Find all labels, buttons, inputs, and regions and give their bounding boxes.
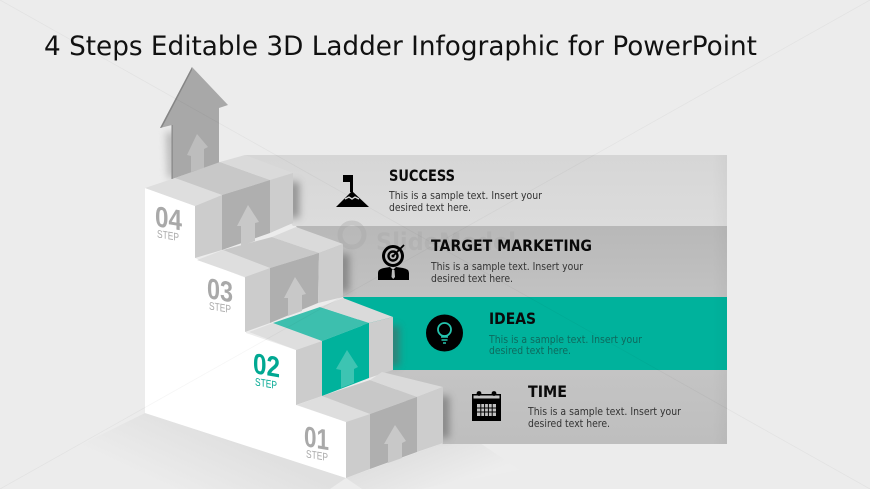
- text: target marketing: desired text here.: [431, 273, 513, 285]
- text: success: This is a sample text. Insert your: [388, 190, 543, 202]
- text: ideas: This is a sample text. Insert your: [488, 334, 643, 346]
- watermark: [340, 223, 516, 256]
- text: success: [388, 166, 543, 214]
- panel: ideas band: [343, 297, 727, 370]
- step label 04: STEP: [157, 228, 179, 244]
- step label 03: STEP: [209, 300, 231, 316]
- text: time: [527, 382, 682, 430]
- white staircase body: [145, 188, 346, 478]
- step label 04: 04: [155, 201, 183, 238]
- text: time: TIME: [528, 382, 567, 401]
- text: ideas: IDEAS: [489, 309, 536, 328]
- text: target marketing: This is a sample text. Insert your: [430, 261, 584, 273]
- step 3 block: [197, 227, 343, 332]
- icon: flag on mountain: [336, 175, 369, 207]
- panel: target marketing band: [296, 226, 727, 297]
- big up arrow: [160, 67, 228, 179]
- panel: time band: [380, 370, 727, 444]
- title: 4 Steps Editable 3D Ladder Infographic for PowerPoint: [44, 31, 757, 62]
- step label 03: 03: [207, 273, 233, 309]
- text: ideas: [488, 309, 643, 357]
- step label 02: 02: [253, 348, 280, 385]
- text: time: desired text here.: [528, 418, 610, 430]
- step 2 block highlighted: [249, 298, 393, 405]
- text: ideas: desired text here.: [489, 345, 571, 357]
- text: target marketing: TARGET MARKETING: [431, 236, 592, 255]
- text: target marketing: [430, 236, 592, 285]
- step 1 block: [297, 372, 443, 478]
- text: time: This is a sample text. Insert your: [527, 406, 682, 418]
- step label 01: STEP: [306, 448, 328, 464]
- floor shadow: [60, 413, 520, 489]
- text: success: SUCCESS: [389, 166, 455, 185]
- text: success: desired text here.: [389, 202, 471, 214]
- step label 02: STEP: [255, 376, 277, 392]
- icon: businessman with target head: [378, 245, 409, 280]
- panel: success band: [245, 155, 727, 226]
- step 4 block: [145, 155, 293, 258]
- step label 01: 01: [304, 421, 329, 457]
- icon: light bulb: [426, 314, 463, 352]
- icon: calendar: [472, 391, 501, 421]
- step label 01: [304, 421, 329, 464]
- watermark: SlideModel: [376, 228, 516, 256]
- step shadows: [289, 182, 449, 438]
